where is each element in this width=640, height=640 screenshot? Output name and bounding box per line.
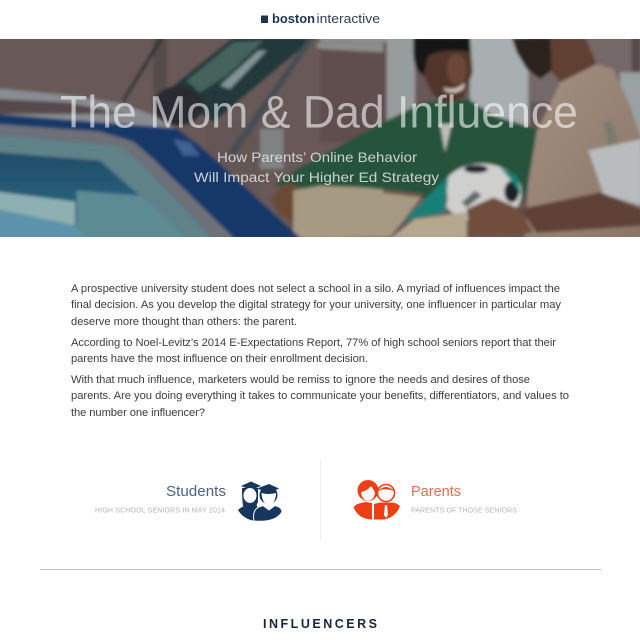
intro text block: According to Noel-Levitz’s 2014 E-Expectations Report, 77% of high school seniors report that their [71, 337, 556, 349]
subtitle: Will Impact Your Higher Ed Strategy [194, 169, 439, 185]
intro text block: With that much influence, marketers would be remiss to ignore the needs and desires of those [71, 374, 530, 386]
divider line [40, 569, 601, 570]
heading: influencers: INFLUENCERS [263, 617, 377, 631]
icon: two parents [354, 480, 400, 520]
intro text block: the number one influencer? [71, 407, 205, 419]
photo: parent and student loading a car [0, 39, 640, 237]
logo: boston interactive: interactive [316, 12, 380, 26]
title: The Mom & Dad Influence [60, 86, 578, 138]
intro text block: final decision. As you develop the digital strategy for your university, one influencer in particular may [71, 299, 561, 311]
logo: boston interactive [261, 12, 380, 26]
subtitle: How Parents’ Online Behavior [217, 149, 417, 165]
panel: parents: Parents [411, 484, 461, 500]
intro text block: A prospective university student does not select a school in a silo. A myriad of influences impact the [71, 283, 560, 295]
intro text block: parents. Are you doing everything it takes to communicate your benefits, differentiators, and values to [71, 390, 569, 402]
panel: parents: PARENTS OF THOSE SENIORS [411, 508, 517, 514]
panel: parents [354, 480, 517, 520]
panel: students [95, 482, 282, 521]
panel: students and parents comparison [95, 460, 517, 540]
intro text block: parents have the most influence on their enrollment decision. [71, 353, 368, 365]
intro text block: deserve more thought than others: the parent. [71, 316, 297, 328]
intro text block [71, 283, 569, 419]
panel: students: Students [166, 484, 226, 500]
panel: students: HIGH SCHOOL SENIORS IN MAY 2014 [95, 508, 225, 514]
hero banner [0, 39, 640, 237]
logo: boston interactive: boston [272, 12, 315, 26]
subtitle [194, 149, 439, 185]
icon: students in graduation caps [238, 482, 282, 521]
hero text: title and subtitle [60, 86, 578, 185]
